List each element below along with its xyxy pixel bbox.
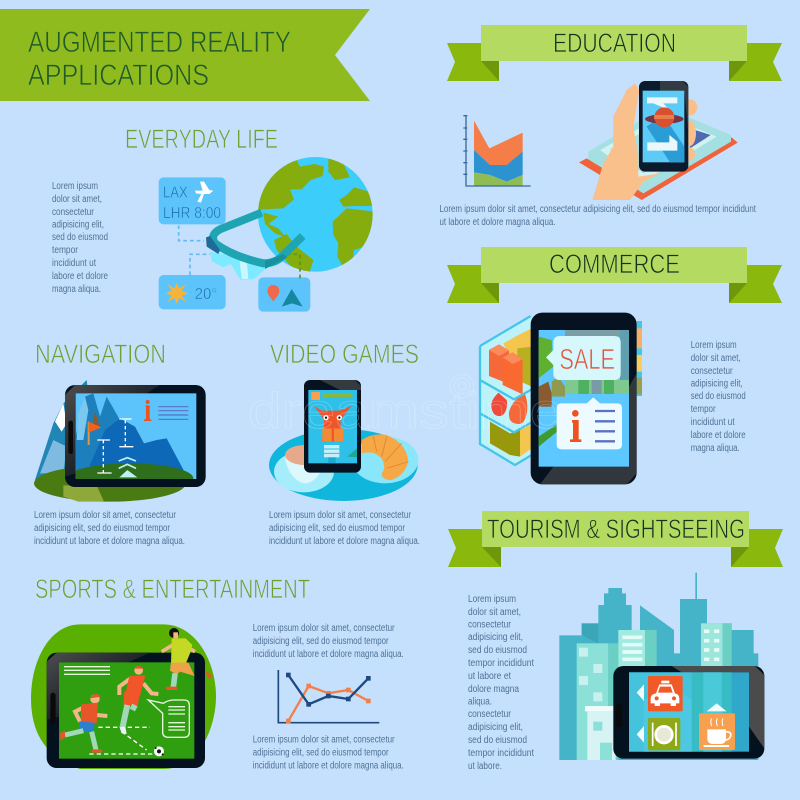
text block: video games: incididunt ut labore et dolore magna aliqua. [269, 536, 420, 547]
text block: everyday life: incididunt ut [52, 258, 96, 269]
text block: commerce: labore et dolore [691, 430, 746, 441]
player: left runner [60, 694, 107, 753]
icon: coffee cup [699, 713, 735, 750]
illustration: tourism city and tablet [559, 573, 764, 760]
icon: game monster [314, 406, 352, 442]
text block: tourism: dolore magna [468, 684, 519, 695]
text block: everyday life: Lorem ipsum [52, 181, 98, 192]
title banner [0, 9, 370, 101]
banner: education [447, 25, 782, 81]
illustration: commerce [479, 313, 642, 484]
icon: phone [531, 313, 637, 484]
heading: everyday life: EVERYDAY LIFE [125, 124, 278, 154]
text block: tourism: ut labore et [468, 671, 511, 682]
icon: phone [304, 380, 361, 473]
text block: video games [269, 510, 420, 547]
text block: sports upper [253, 623, 404, 660]
text block: everyday life: labore et dolore [52, 271, 108, 282]
area chart [463, 116, 531, 186]
icon: flag [88, 412, 101, 445]
text block: navigation: adipisicing elit, sed do eiusmod tempor [34, 523, 171, 534]
dashed pass lines [89, 727, 153, 754]
text block: tourism [468, 594, 534, 772]
text block: tourism: Lorem ipsum [468, 594, 516, 605]
connector lines [179, 225, 300, 278]
title banner: AUGMENTED REALITY [28, 26, 291, 59]
icon: hand [592, 83, 697, 200]
text block: everyday life: dolor sit amet, [52, 194, 102, 205]
icon: plate [269, 429, 418, 501]
text block: education [440, 204, 756, 228]
icon: store shelves [479, 315, 642, 465]
text block: everyday life: consectetur [52, 207, 95, 218]
text block: everyday life: magna aliqua. [52, 284, 101, 295]
icon: croissant [362, 434, 408, 480]
icon: plane [195, 182, 213, 203]
text block: tourism: dolor sit amet, [468, 607, 521, 618]
text block: everyday life: adipisicing elit, [52, 220, 104, 230]
icon: soccer ball [154, 746, 164, 756]
text block: tourism: adipisicing elit, [468, 632, 523, 643]
callout: flight info: LAX [163, 184, 188, 201]
callout: sale [546, 336, 621, 380]
text block: commerce: incididunt ut [691, 417, 735, 428]
icon: phone [639, 81, 688, 172]
chat bubble [148, 700, 189, 737]
callout: sale: SALE [559, 344, 615, 376]
text block: tourism: sed do eiusmod [468, 735, 527, 746]
icon: taxi [648, 676, 683, 711]
text block: video games: Lorem ipsum dolor sit amet, consectetur [269, 510, 412, 521]
callout: weather [159, 275, 226, 309]
text block: tourism: consectetur [468, 620, 512, 630]
text block: commerce: adipisicing elit, [691, 378, 743, 390]
text block: sports lower: Lorem ipsum dolor sit amet, consectetur [253, 735, 395, 746]
illustration: sports [31, 624, 216, 769]
icon: mountain [34, 380, 186, 502]
icon: tablet [47, 653, 213, 768]
heading: navigation: NAVIGATION [35, 339, 166, 369]
banner: education: EDUCATION [553, 28, 676, 58]
text block: everyday life: tempor [52, 245, 79, 256]
text block: navigation: Lorem ipsum dolor sit amet, consectetur [34, 510, 177, 521]
text block: tourism: consectetur [468, 709, 512, 720]
banner: commerce [447, 247, 782, 303]
text block: commerce: sed do eiusmod [691, 391, 746, 402]
callout: info [557, 397, 622, 449]
icon: glasses [206, 213, 303, 280]
text block: education: ut labore et dolore magna aliqua. [440, 217, 556, 228]
text block: video games: adipisicing elit, sed do eiusmod tempor [269, 523, 406, 534]
banner: tourism and sightseeing [448, 511, 783, 567]
icon: tablet [613, 666, 764, 759]
text block: sports upper: Lorem ipsum dolor sit amet, consectetur [253, 623, 395, 634]
text block: commerce: dolor sit amet, [691, 353, 741, 364]
illustration: video games [269, 380, 418, 501]
illustration: navigation [34, 380, 206, 502]
text block: tourism: sed do eiusmod [468, 645, 527, 656]
callout: flight info: LHR 8:00 [163, 205, 221, 222]
callout: flight info [159, 177, 226, 224]
text block: sports lower: adipisicing elit, sed do eiusmod tempor [253, 748, 389, 758]
title banner: APPLICATIONS [28, 59, 209, 92]
callout: map [258, 277, 310, 312]
text block: commerce: tempor [691, 404, 716, 415]
banner: commerce: COMMERCE [549, 249, 680, 279]
text block: sports lower: incididunt ut labore et dolore magna aliqua. [253, 760, 404, 771]
callout: weather: 20° [195, 286, 217, 303]
text block: navigation [34, 510, 185, 547]
text block: navigation: incididunt ut labore et dolore magna aliqua. [34, 536, 185, 547]
icon: sun [166, 283, 189, 304]
city skyline [559, 573, 758, 760]
illustration: everyday life glasses and globe [159, 153, 375, 312]
icon: open book [579, 107, 738, 200]
text block: tourism: tempor incididunt [468, 748, 534, 759]
icon: dining plate [648, 718, 680, 750]
text block: tourism: ut labore. [468, 761, 502, 772]
text block: commerce: Lorem ipsum [691, 340, 737, 351]
text block: everyday life: sed do eiusmod [52, 232, 108, 243]
text block: sports lower [253, 735, 404, 771]
text block: tourism: adipisicing elit, [468, 722, 523, 733]
icon: globe [257, 153, 375, 273]
player: centre runner [119, 666, 158, 734]
heading: video games: VIDEO GAMES [270, 339, 419, 369]
text block: sports upper: adipisicing elit, sed do eiusmod tempor [253, 636, 389, 647]
text block: commerce: magna aliqua. [691, 443, 740, 454]
text block: sports upper: incididunt ut labore et dolore magna aliqua. [253, 649, 404, 660]
text block: commerce: consectetur [691, 366, 733, 377]
icon: tablet [65, 385, 206, 493]
text block: tourism: aliqua. [468, 696, 492, 708]
text block: commerce [691, 340, 746, 454]
illustration: education [463, 81, 738, 200]
text block: tourism: tempor incididunt [468, 658, 534, 669]
heading: sports and entertainment: SPORTS & ENTERTAINMENT [35, 574, 310, 604]
line chart [278, 670, 379, 723]
watermark: dreamstime [248, 383, 563, 439]
green backdrop [31, 624, 216, 769]
player: yellow shirt [162, 628, 195, 690]
text block: everyday life [52, 181, 108, 295]
